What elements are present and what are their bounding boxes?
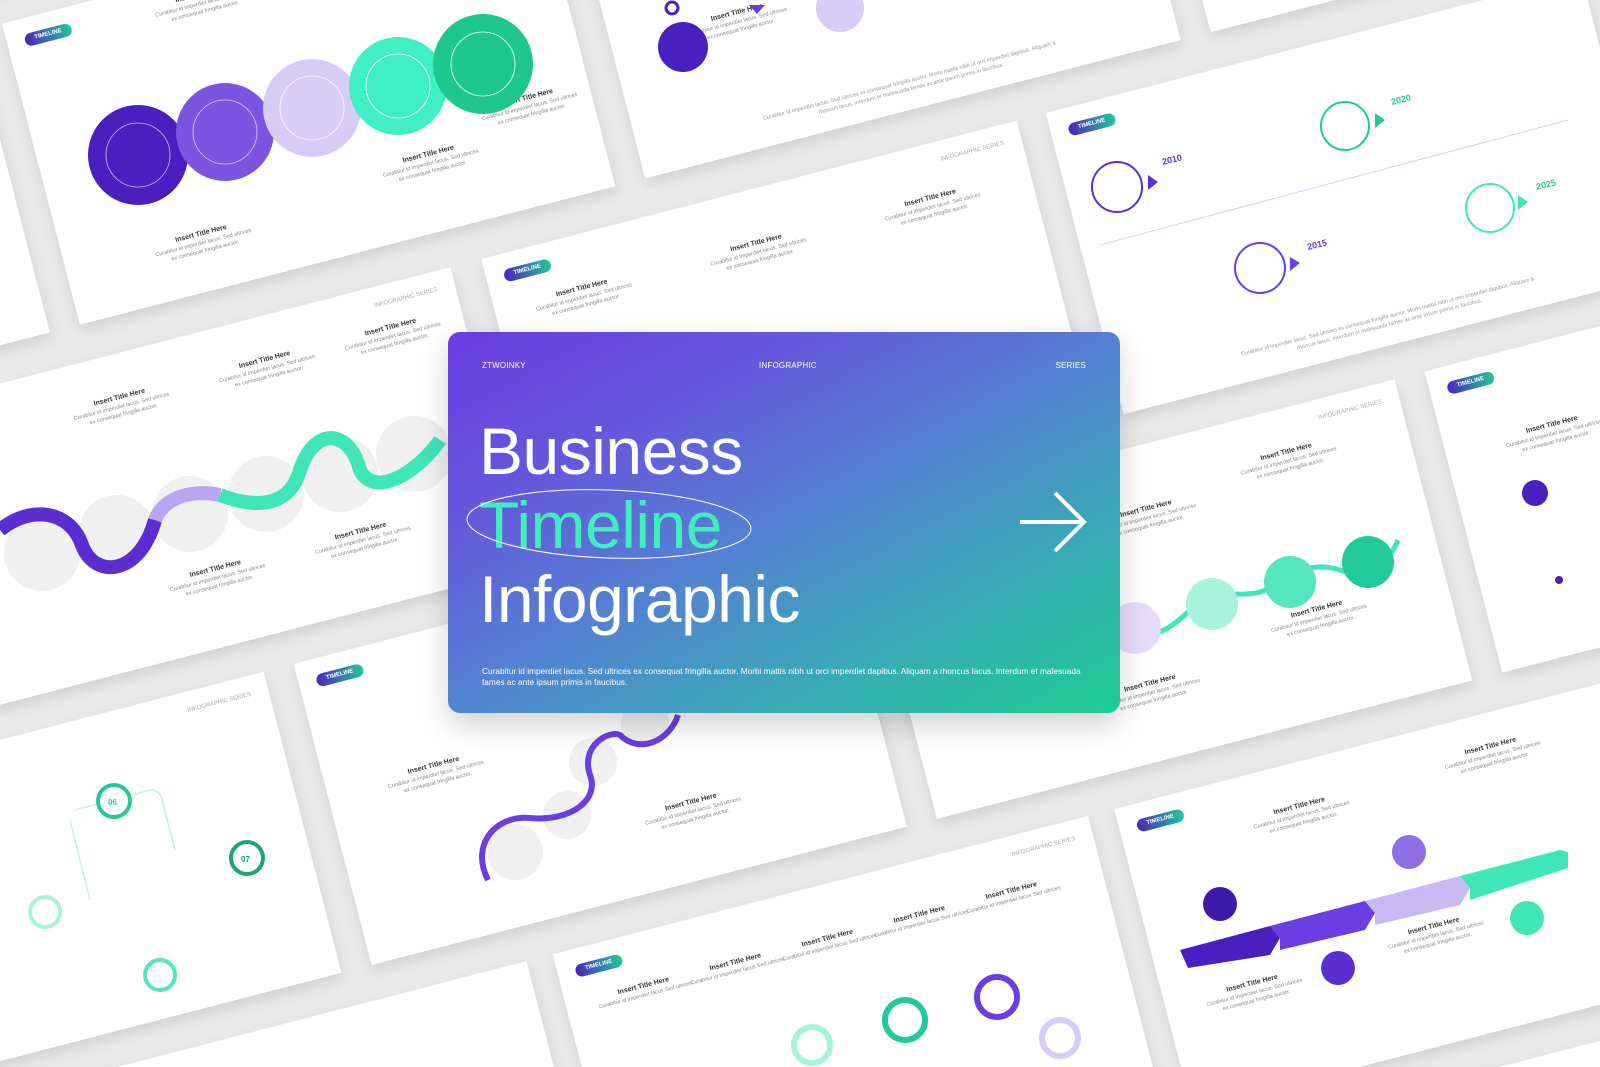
- title: Business: [479, 414, 743, 488]
- slide: wave left: Curabitur id imperdiet lacus. Sed ultrices ex consequat fringilla auctor.: [73, 392, 170, 426]
- central title card: INFOGRAPHIC: [759, 361, 817, 370]
- slide: arrow band: Insert Title Here: [1407, 916, 1460, 936]
- slide: years: [1046, 0, 1600, 414]
- slide: arrow band: Insert Title Here: [1273, 796, 1326, 816]
- slide: center behind: Insert Title Here: [904, 188, 957, 208]
- slide: wave bottom center: TIMELINE: [326, 668, 354, 681]
- slide: center behind: TIMELINE: [513, 263, 542, 276]
- wave left: [0, 416, 452, 591]
- slide: rings: Insert Title Here: [709, 952, 762, 972]
- slide: wave right: Curabitur id imperdiet lacus. Sed ultrices ex consequat fringilla auctor.: [1270, 604, 1368, 638]
- central title card: [448, 332, 1120, 713]
- slide: years: Curabitur id imperdiet lacus. Sed ultrices ex consequat fringilla auctor. Morbi mattis nibh ut orci imperdiet dapibus. Aliquam a rhoncus lacus. Interdum et malesuada fames ac ante ipsum primis in faucibus.: [1241, 276, 1535, 358]
- slide: rings: TIMELINE: [584, 959, 613, 972]
- slide: rings: Curabitur id imperdiet lacus Sed ultrices: [690, 956, 786, 987]
- years timeline: [1092, 92, 1568, 293]
- slide: wave right: Curabitur id imperdiet lacus. Sed ultrices ex consequat fringilla auctor.: [1104, 678, 1201, 712]
- circles timeline: [88, 14, 533, 205]
- slide: wave left: Curabitur id imperdiet lacus. Sed ultrices ex consequat fringilla auctor.: [218, 354, 316, 389]
- slide: arrow band: Curabitur id imperdiet lacus. Sed ultrices ex consequat fringilla auctor.: [1206, 978, 1303, 1012]
- slide: wave right: INFOGRAPHIC SERIES: [1318, 399, 1383, 421]
- slide: years: TIMELINE: [1078, 117, 1106, 130]
- description: Curabitur id imperdiet lacus. Sed ultrices ex consequat fringilla auctor. Morbi mattis nibh ut orci imperdiet dapibus. Aliquam a rhoncus lacus. Interdum et malesuada fames ac ante ipsum primis in faucibus.: [482, 666, 1081, 687]
- slide: center behind: INFOGRAPHIC SERIES: [940, 141, 1005, 163]
- slide: wave right: Insert Title Here: [1120, 499, 1172, 519]
- slide: circles timeline: Curabitur id imperdiet lacus. Sed ultrices ex consequat fringilla auctor.: [155, 228, 252, 263]
- slide: wave bottom center: Curabitur id imperdiet lacus. Sed ultrices ex consequat fringilla auctor.: [645, 796, 742, 831]
- slide: wave left: Insert Title Here: [189, 559, 242, 579]
- slide: rings: Insert Title Here: [893, 905, 946, 925]
- slide: wave right: Curabitur id imperdiet lacus. Sed ultrices ex consequat fringilla auctor.: [1240, 446, 1337, 481]
- top middle icons: [658, 0, 864, 72]
- slide: wave left: Curabitur id imperdiet lacus. Sed ultrices ex consequat fringilla auctor.: [314, 525, 412, 560]
- slide: wave left: INFOGRAPHIC SERIES: [374, 287, 438, 309]
- slide: arrow band: Curabitur id imperdiet lacus. Sed ultrices ex consequat fringilla auctor.: [1388, 920, 1485, 955]
- slide: wave left: Insert Title Here: [93, 388, 146, 408]
- slide: circles timeline: Insert Title Here: [501, 88, 554, 108]
- slide: arrow band: [1114, 671, 1600, 1067]
- bottom right arrow band: [1180, 835, 1568, 985]
- slide: top middle: Curabitur id imperdiet lacus. Sed ultrices ex consequat fringilla auctor.: [691, 7, 788, 41]
- text: TIMELINE: [1456, 376, 1485, 389]
- slide: center behind: Insert Title Here: [555, 278, 608, 298]
- slide: circles timeline: Curabitur id imperdiet lacus. Sed ultrices ex consequat fringilla auctor.: [481, 92, 578, 126]
- header labels: ZTWOINKY: [482, 361, 526, 370]
- slide: rings: Insert Title Here: [985, 881, 1038, 901]
- slide: rings: Curabitur id imperdiet lacus Sed ultrices: [874, 909, 970, 939]
- slide: center behind: Insert Title Here: [730, 233, 782, 253]
- slide: wave bottom center: [294, 525, 907, 965]
- years timeline: 2020: [1390, 92, 1412, 107]
- wave right: [1109, 480, 1563, 654]
- central title card: Timeline: [479, 488, 722, 562]
- slide: top middle: [567, 0, 1181, 178]
- slide: wave right: Insert Title Here: [1123, 674, 1176, 694]
- slide: wave bottom center: Insert Title Here: [666, 678, 719, 698]
- slide: wave left: Insert Title Here: [238, 350, 291, 370]
- slide: wave left: [0, 267, 528, 707]
- slide: rings: Curabitur id imperdiet lacus Sed ultrices: [966, 885, 1062, 915]
- slide: arrow band: Insert Title Here: [1226, 974, 1279, 994]
- bottom middle rings: [794, 977, 1078, 1063]
- slide: arrow band: Curabitur id imperdiet lacus. Sed ultrices ex consequat fringilla auctor.: [1444, 740, 1541, 775]
- years timeline: 2010: [1161, 152, 1183, 167]
- slide: circles timeline: [2, 0, 615, 325]
- slide: top middle: Curabitur id imperdiet lacus. Sed ultrices ex consequat fringilla auctor. Morbi mattis nibh ut orci imperdiet dapibus. Aliquam a rhoncus lacus. Interdum et malesuada fames ac ante ipsum primis in faucibus.: [762, 41, 1056, 122]
- slide: top middle: Insert Title Here: [710, 3, 763, 23]
- slide: rings: Insert Title Here: [801, 929, 854, 949]
- slide: steps: INFOGRAPHIC SERIES: [187, 692, 252, 714]
- slide: wave right: Insert Title Here: [1290, 600, 1343, 620]
- ellipse and arrow: [466, 489, 1087, 559]
- central title card: SERIES: [1055, 361, 1086, 370]
- text: Insert Title Here: [1525, 415, 1578, 435]
- slide: center behind: Curabitur id imperdiet lacus. Sed ultrices ex consequat fringilla auctor.: [710, 237, 807, 272]
- slide: center behind: [481, 121, 1095, 560]
- slide: circles timeline: Curabitur id imperdiet lacus. Sed ultrices ex consequat fringilla auctor.: [382, 148, 479, 183]
- text: Curabitur id imperdiet lacus. Sed ultrices ex consequat fringilla auctor.: [1506, 419, 1600, 453]
- slide: wave left: Curabitur id imperdiet lacus. Sed ultrices ex consequat fringilla auctor.: [344, 321, 441, 356]
- slide: arrow band: TIMELINE: [1146, 814, 1175, 826]
- slide: wave right: Curabitur id imperdiet lacus. Sed ultrices ex consequat fringilla auctor.: [1100, 503, 1197, 538]
- 06 07 steps: 06: [108, 798, 117, 807]
- central title card: Infographic: [479, 562, 800, 636]
- slide: rings: INFOGRAPHIC SERIES: [1011, 836, 1076, 858]
- years timeline: 2015: [1306, 237, 1328, 252]
- years timeline: 2025: [1535, 177, 1557, 192]
- slide: wave bottom center: Curabitur id imperdiet lacus. Sed ultrices ex consequat fringilla auctor.: [387, 760, 485, 794]
- slide: steps: [0, 672, 342, 1067]
- 06 07 steps: 07: [241, 855, 250, 864]
- slide: circles timeline: Insert Title Here: [175, 224, 227, 244]
- slide: rings: Insert Title Here: [617, 976, 670, 996]
- slide: rings: [553, 816, 1166, 1067]
- bottom center wave: [482, 699, 678, 880]
- slide: wave right: [859, 379, 1472, 819]
- slide: wave right: Insert Title Here: [1260, 442, 1313, 462]
- slide: arrow band: Curabitur id imperdiet lacus. Sed ultrices ex consequat fringilla auctor.: [1253, 800, 1350, 835]
- slide: arrow band: Insert Title Here: [1464, 736, 1517, 756]
- slide: rings: Curabitur id imperdiet lacus Sed ultrices: [598, 980, 694, 1010]
- slide: wave left: Insert Title Here: [364, 317, 417, 337]
- slide: circles timeline: TIMELINE: [34, 28, 63, 41]
- slide: wave bottom center: Insert Title Here: [665, 792, 717, 812]
- slide: wave left: Insert Title Here: [334, 521, 387, 541]
- slide: circles timeline: Insert Title Here: [402, 144, 455, 164]
- slide: center behind: Curabitur id imperdiet lacus. Sed ultrices ex consequat fringilla auctor.: [536, 282, 633, 317]
- slide: rings: Curabitur id imperdiet lacus Sed ultrices: [782, 933, 878, 963]
- slide: wave left: Curabitur id imperdiet lacus. Sed ultrices ex consequat fringilla auctor.: [169, 563, 266, 598]
- slide: wave bottom center: Curabitur id imperdiet lacus. Sed ultrices ex consequat fringilla auctor.: [646, 682, 743, 717]
- slide: center behind: Curabitur id imperdiet lacus. Sed ultrices ex consequat fringilla auctor.: [884, 192, 981, 227]
- 06 07 steps: [30, 785, 263, 990]
- slide: wave bottom center: Insert Title Here: [407, 756, 460, 776]
